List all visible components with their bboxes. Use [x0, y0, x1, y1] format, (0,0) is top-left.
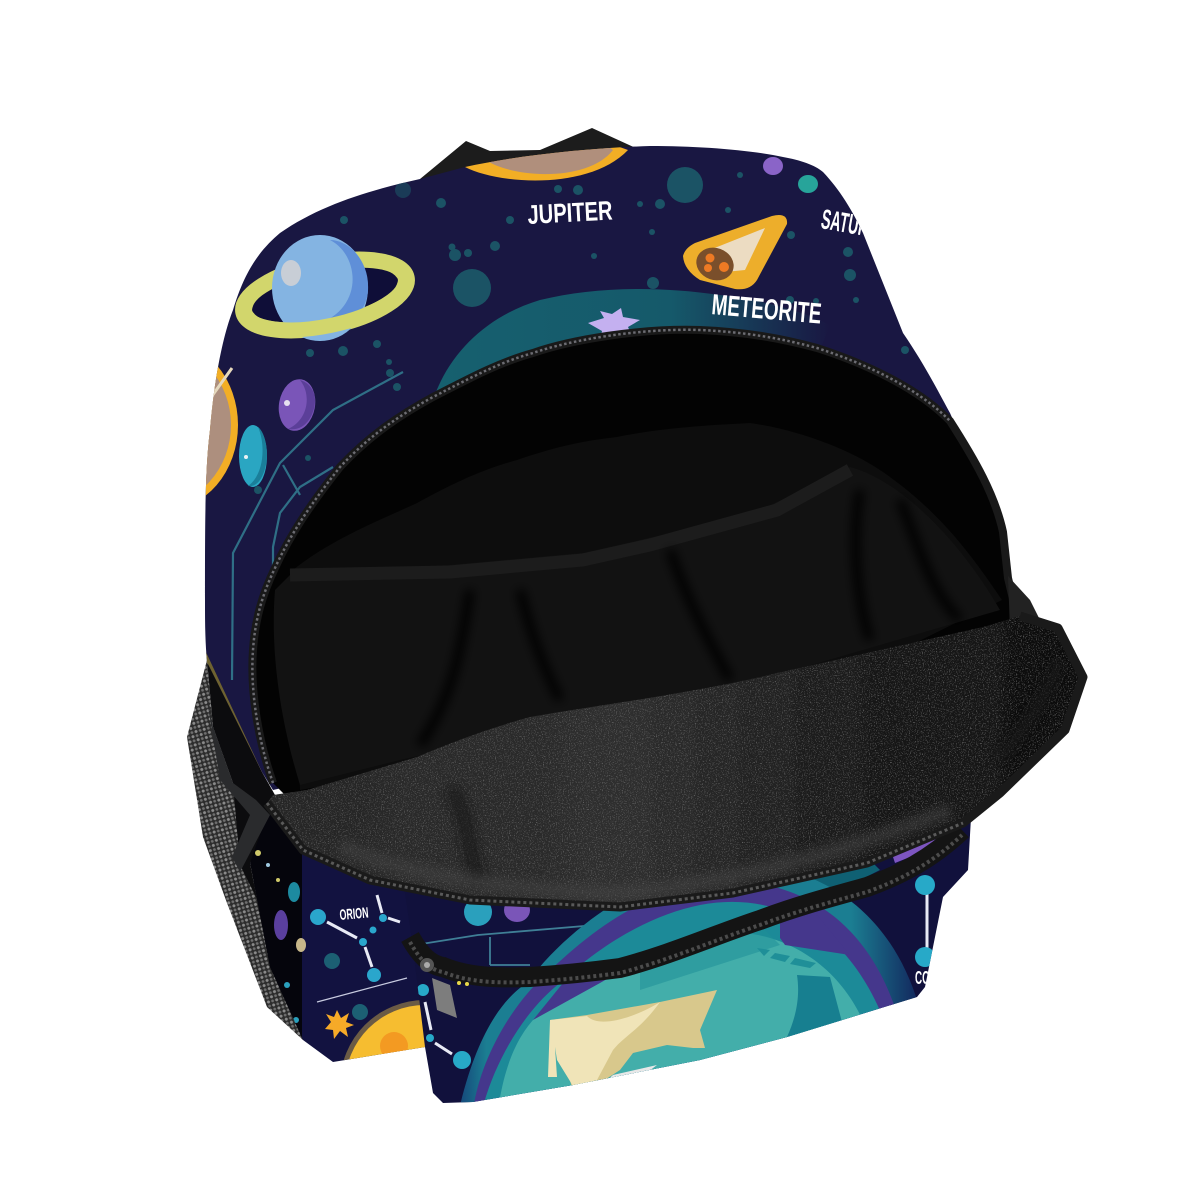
navy side pocket print — [250, 830, 425, 1062]
meteorite — [683, 215, 787, 289]
flap zipper edge — [267, 616, 1083, 907]
astronaut helmet rings — [460, 880, 916, 1102]
big tan planet — [206, 366, 238, 496]
lower left constellation — [417, 984, 471, 1069]
yellow planet edge — [205, 650, 262, 772]
jupiter label: JUPITER — [527, 196, 613, 230]
small printed planets on the dark side panel — [255, 850, 306, 1023]
strip between zippers — [425, 839, 936, 966]
orange star — [325, 1010, 354, 1039]
main zipper — [252, 330, 1018, 783]
main body back panel — [205, 146, 1018, 790]
front pocket — [418, 822, 971, 1103]
right constellation — [915, 875, 935, 984]
dark gusset between mesh and body — [207, 660, 303, 1040]
backpack illustration — [187, 128, 1088, 1103]
teal planet — [239, 425, 267, 487]
right strap stub — [1008, 576, 1043, 630]
left zipper tail strap — [207, 700, 270, 872]
saturn label: SATURN — [819, 203, 881, 244]
purple planet — [278, 379, 316, 431]
jupiter planet — [465, 147, 628, 180]
meteorite label: METEORITE — [710, 289, 823, 331]
sun — [344, 1000, 425, 1060]
top carry handle — [420, 128, 640, 185]
earth continent on helmet — [548, 990, 717, 1090]
right constellation: COMA — [915, 968, 945, 988]
constellation lines — [232, 372, 403, 680]
saturn style planet — [237, 247, 413, 343]
lower opened flap with fleece lining — [267, 616, 1083, 907]
flap speckled rim — [340, 810, 950, 893]
main interior lining — [252, 330, 1020, 810]
teal dot — [798, 175, 818, 193]
inner slip pocket — [274, 467, 1000, 785]
orion constellation: ORION — [339, 905, 369, 924]
purple dot — [763, 157, 783, 175]
side mesh pocket — [187, 660, 312, 1040]
orion constellation — [310, 895, 407, 1020]
second pocket zipper — [410, 830, 962, 982]
second zipper pull tab — [420, 958, 469, 1018]
interior back wall — [293, 423, 1002, 790]
scattered teal dots — [254, 167, 909, 494]
teal helmet dome — [436, 289, 810, 391]
printed artwork on main body — [206, 147, 909, 772]
left side panel of the main body — [250, 830, 425, 1062]
partial teal planet — [886, 278, 898, 290]
flap shadow folds — [450, 660, 1060, 880]
purple star on dome — [588, 308, 640, 333]
